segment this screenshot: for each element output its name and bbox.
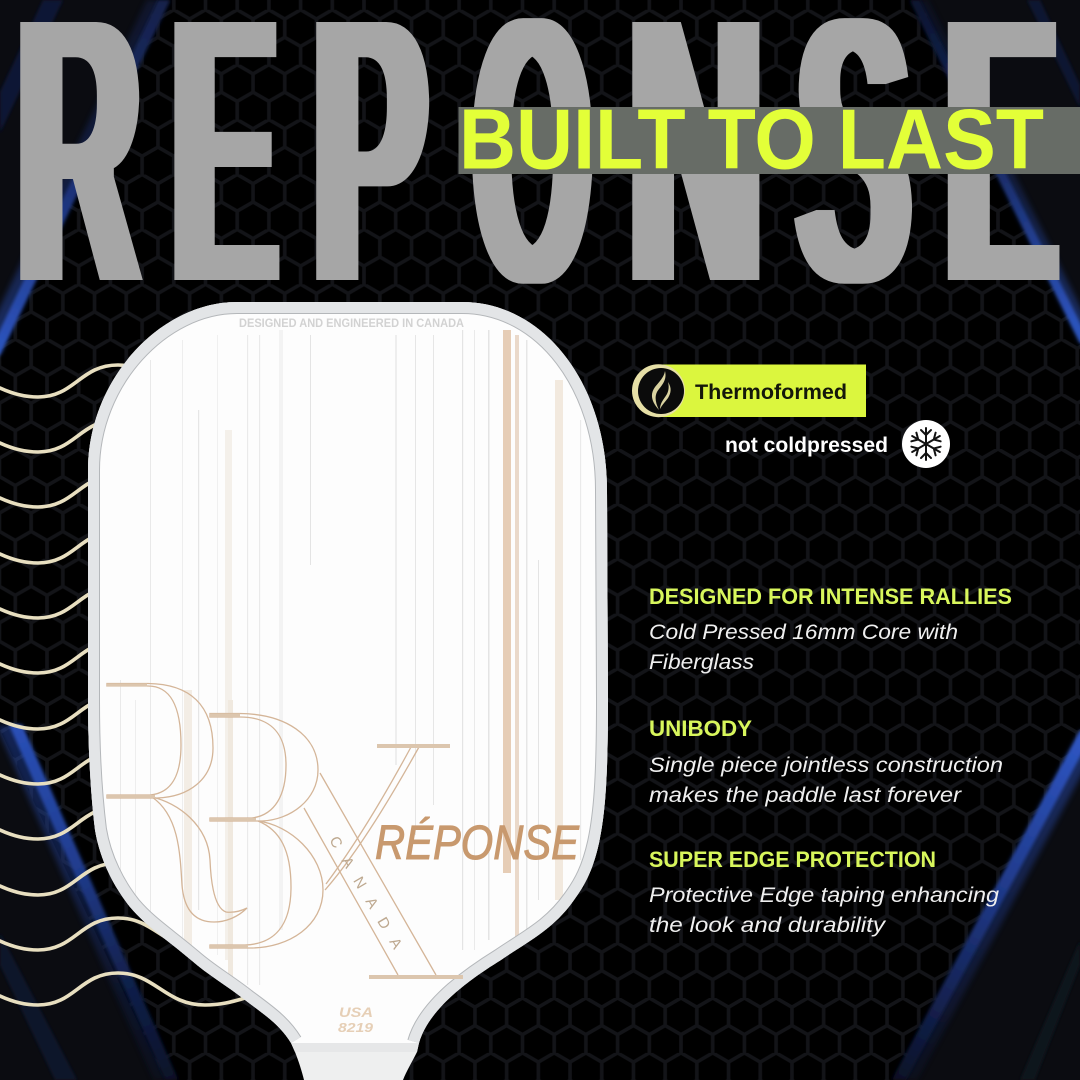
paddle vertical stripes (120, 330, 581, 985)
feature: Unibody: UNIBODY (649, 716, 752, 741)
heading: REPONSE (18, 0, 1057, 366)
feature: Super edge protection (649, 847, 999, 937)
note: not coldpressed: not coldpressed (725, 434, 888, 457)
badge bar (660, 364, 866, 417)
paddle top caption: DESIGNED AND ENGINEERED IN CANADA (239, 318, 464, 330)
feature: Super edge protection: Protective Edge taping enhancing (649, 884, 999, 907)
logo text: REPONSE: RÉPONSE (375, 817, 580, 870)
icon: snowflake (902, 420, 950, 468)
feature: Unibody: Single piece jointless construction (649, 754, 1003, 777)
feature: Designed for intense rallies (649, 584, 1012, 674)
banner: BUILT TO LAST: BUILT TO LAST (459, 92, 1044, 188)
paddle handle (291, 1043, 419, 1080)
USA mark: 8219 (338, 1020, 374, 1035)
feature: Unibody (649, 716, 1003, 807)
wavy cream lines behind paddle (0, 365, 245, 1005)
badge: Thermoformed (632, 364, 866, 417)
paddle collar (291, 1043, 419, 1052)
logo text: CANADA: CANADA (326, 833, 405, 952)
logo: RBX monogram outlines (107, 684, 436, 975)
USA mark: USA (339, 1004, 373, 1020)
logo: serif bars (107, 684, 463, 979)
feature: Designed for intense rallies: DESIGNED FOR INTENSE RALLIES (649, 584, 1012, 609)
feature: Designed for intense rallies: Cold Pressed 16mm Core with (649, 621, 958, 644)
icon: flame in circle (632, 364, 685, 417)
feature: Super edge protection: SUPER EDGE PROTECTION (649, 847, 936, 872)
paddle (88, 302, 608, 1080)
feature: Designed for intense rallies: Fiberglass (649, 651, 755, 674)
paddle rim (88, 302, 608, 1043)
feature: Super edge protection: the look and durability (649, 914, 887, 937)
badge label: Thermoformed (695, 381, 847, 404)
paddle face (88, 302, 608, 1043)
USA mark (338, 1004, 374, 1035)
feature: Unibody: makes the paddle last forever (649, 784, 962, 807)
